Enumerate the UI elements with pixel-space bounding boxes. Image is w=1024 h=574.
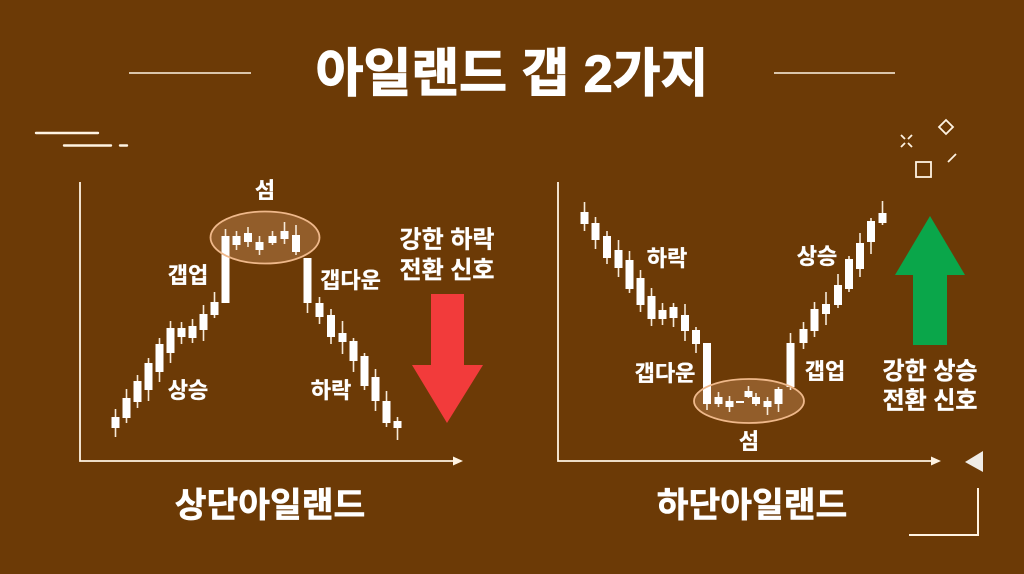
label: rise: 상승 — [168, 378, 208, 403]
chart axes — [80, 182, 463, 466]
title rule left — [129, 72, 251, 74]
label: gap up: 갭업 — [168, 263, 208, 288]
title: 아일랜드 갭 2가지 — [316, 46, 708, 104]
candlesticks: upper island — [112, 222, 402, 440]
island highlight outline — [210, 212, 320, 264]
candlesticks: lower island — [580, 201, 886, 415]
icon: triangle — [965, 451, 983, 472]
label: fall: 하락 — [311, 378, 351, 403]
title rule right — [774, 72, 895, 74]
callout: bearish reversal — [400, 226, 494, 284]
decorative icons top right — [901, 120, 956, 177]
label: rise: 상승 — [797, 244, 837, 269]
label: fall: 하락 — [647, 246, 687, 271]
callout: bullish reversal: 강한 상승 — [882, 358, 978, 385]
callout: bearish reversal: 강한 하락 — [400, 226, 494, 254]
arrow: red down — [412, 294, 483, 423]
decorative corner bracket — [909, 488, 978, 535]
island highlight fill — [210, 212, 320, 264]
label: gap up: 갭업 — [805, 359, 845, 384]
label: island: 섬 — [255, 178, 275, 203]
callout: bullish reversal: 전환 신호 — [882, 388, 978, 414]
callout: bearish reversal: 전환 신호 — [400, 257, 494, 284]
chart heading: 하단아일랜드 — [657, 487, 847, 525]
chart axes — [558, 182, 941, 466]
island highlight fill — [694, 379, 804, 423]
label: gap down: 갭다운 — [635, 361, 695, 386]
panel: upper island chart — [80, 178, 463, 525]
decorative dashes top left — [36, 133, 127, 146]
callout: bullish reversal — [882, 358, 978, 414]
chart heading: 상단아일랜드 — [175, 487, 365, 525]
label: island: 섬 — [739, 429, 759, 454]
island highlight outline — [694, 379, 804, 423]
panel: lower island chart — [558, 182, 941, 525]
label: gap down: 갭다운 — [320, 268, 381, 293]
arrow: green up — [895, 216, 965, 345]
